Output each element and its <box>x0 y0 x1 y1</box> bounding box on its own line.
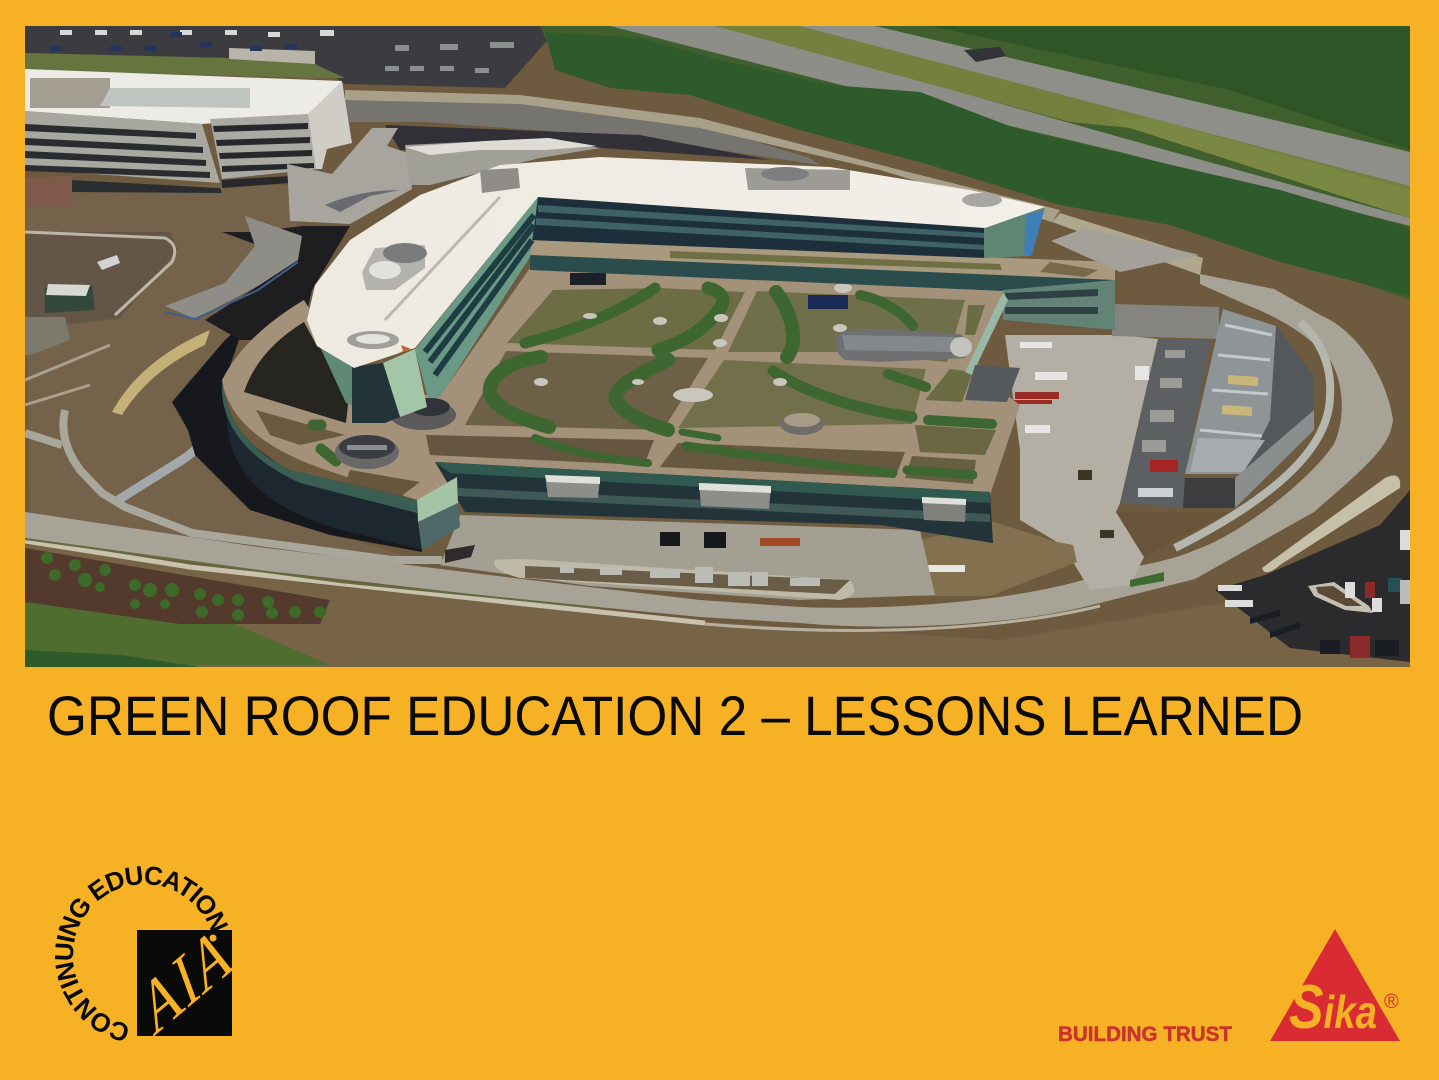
AIA continuing education logo <box>54 866 232 1040</box>
perimeter road <box>25 213 1393 630</box>
dark recess inside curved terrace <box>244 322 352 423</box>
AIA black square: AIA <box>131 907 241 1052</box>
tree band <box>545 32 1410 296</box>
grey loading dock roof <box>965 365 1020 402</box>
skylights and rotundas <box>335 273 972 469</box>
Sika logo: Sika <box>1289 973 1377 1042</box>
right wing canopy <box>1051 228 1199 272</box>
left ground, brown construction area <box>25 185 442 560</box>
dark shadow beside curved wing <box>172 322 422 552</box>
lower right parking lot <box>1215 476 1410 662</box>
upper left parking lot <box>25 26 560 88</box>
connector roofs and curved canopy <box>165 128 600 319</box>
lower field with young trees <box>25 540 1410 667</box>
aerial photo of building with green roof <box>25 26 1410 667</box>
glass wall along the yard <box>965 292 1008 375</box>
lower front facade with white bays <box>435 462 993 543</box>
AIA black square <box>137 930 232 1036</box>
title: GREEN ROOF EDUCATION 2 – LESSONS LEARNED <box>47 684 1303 747</box>
green roof deck, tan terrace <box>222 240 1115 500</box>
circular text: continuing education: CONTINUING EDUCATION <box>54 866 228 1040</box>
dark shadow between canopy and roof <box>205 226 350 340</box>
teal facade of the second tier <box>530 255 1115 330</box>
lot in front of the building <box>440 515 935 600</box>
curved wing facade and corner block <box>222 380 460 550</box>
planted roof panels <box>256 288 996 497</box>
Sika logo <box>1270 929 1400 1042</box>
hedge rows <box>313 288 992 475</box>
tagline: building trust: BUILDING TRUST <box>1058 1023 1232 1046</box>
perimeter wall and rear parking <box>345 90 1060 222</box>
Sika logo: ® <box>1384 991 1399 1013</box>
tower facade with glass and white roof <box>307 157 1045 423</box>
upper left office building <box>25 69 352 207</box>
highway and grass strips <box>540 26 1410 300</box>
service yard and mechanical enclosure <box>911 304 1330 596</box>
